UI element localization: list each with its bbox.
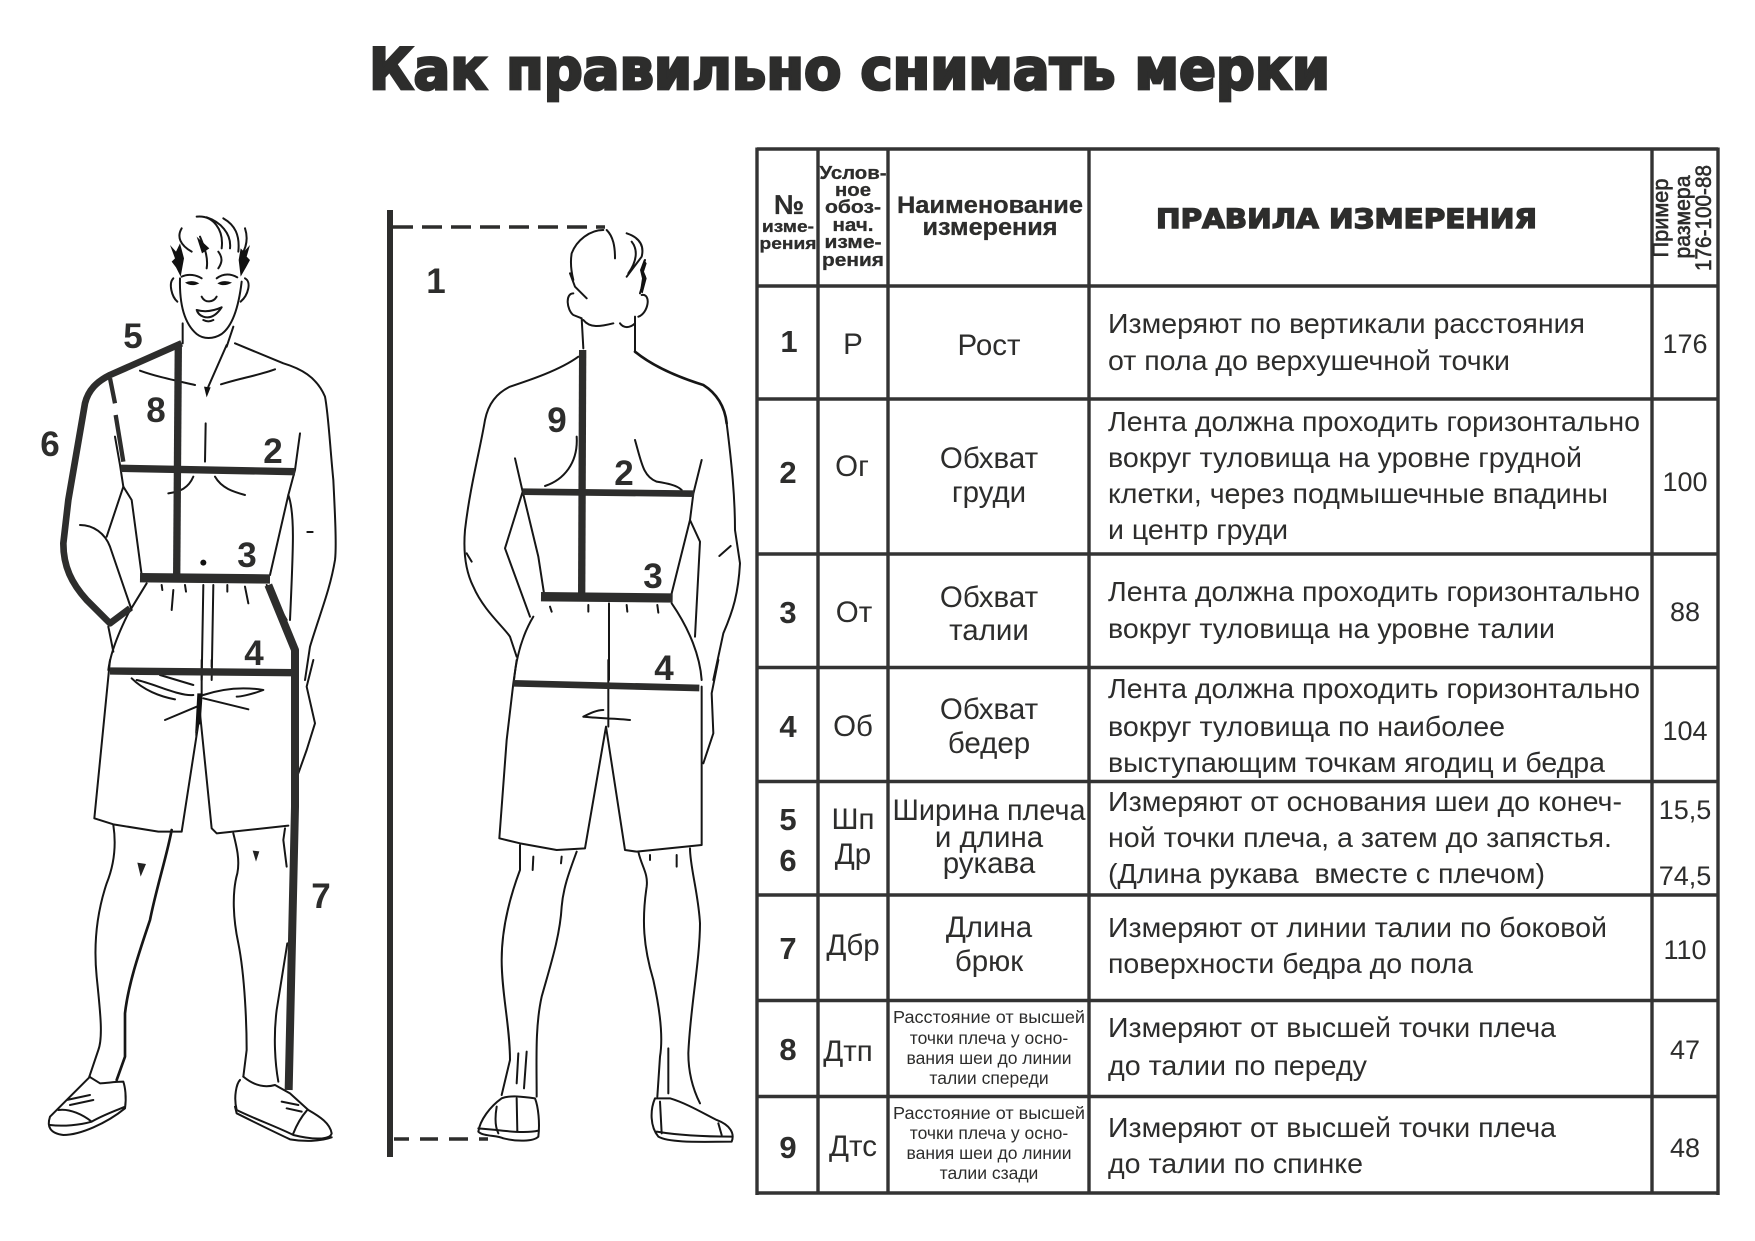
row 5-6: shoulder and sleeve [779,786,1711,891]
row 2: chest [779,406,1708,545]
front figure labels: 4 [244,634,264,673]
front figure labels [40,317,331,916]
row 9: back waist length: вания шеи до линии [906,1143,1072,1163]
table header row: ПРАВИЛА ИЗМЕРЕНИЯ [1156,204,1537,235]
row 3: waist [779,576,1700,647]
row 9: back waist length: 48 [1670,1133,1700,1163]
front length line 8 [177,343,178,578]
shoulder and sleeve line 5-6 [63,343,182,623]
row 1: height: Рост [957,329,1021,362]
row 9: back waist length: Расстояние от высшей [893,1103,1085,1123]
row 8: front waist length: талии спереди [929,1068,1049,1088]
row 2: chest: клетки, через подмышечные впадины [1108,478,1608,509]
row 4: hips: Лента должна проходить горизонтально [1108,673,1640,704]
back figure legs and shoes [478,660,733,1142]
row 2: chest: 2 [779,455,797,490]
back figure labels [547,401,674,688]
table header row: измерения [922,214,1058,241]
chest line 2 [121,468,295,472]
row 8: front waist length: до талии по переду [1108,1050,1367,1081]
table header row: изме- [824,231,882,252]
row 9: back waist length: Измеряют от высшей точки плеча [1108,1112,1556,1143]
front figure labels: 2 [263,432,283,471]
row 9: back waist length: до талии по спинке [1108,1148,1363,1179]
row 1: height [780,308,1708,376]
table header row: 176-100-88 [1691,165,1716,271]
row 3: waist: Обхват [940,581,1038,614]
front figure legs and shoes [49,660,332,1141]
height scale with dashed guides: 1 [426,262,446,301]
table header row: ное [835,179,871,200]
row 9: back waist length: 9 [779,1130,797,1165]
table header row: рения [822,249,884,270]
table header row: Наименование [897,192,1083,219]
back figure labels: 3 [643,557,663,596]
row 9: back waist length: Дтс [829,1130,877,1163]
row 3: waist: 3 [779,595,797,630]
row 5-6: shoulder and sleeve: 15,5 [1659,795,1711,825]
row 5-6: shoulder and sleeve: 5 [779,802,797,837]
row 8: front waist length: Расстояние от высшей [893,1007,1085,1027]
table header row: Пример [1648,178,1673,258]
row 5-6: shoulder and sleeve: (Длина рукава вместе с плечом) [1108,858,1545,889]
row 4: hips [779,673,1708,778]
row 3: waist: 88 [1670,597,1700,627]
front figure labels: 6 [40,425,60,464]
row 8: front waist length: 47 [1670,1035,1700,1065]
front figure labels: 7 [311,877,331,916]
row 4: hips: 104 [1662,716,1708,746]
back figure labels: 4 [654,649,674,688]
row 3: waist: вокруг туловища на уровне талии [1108,613,1555,644]
row 3: waist: талии [949,614,1029,647]
row 2: chest: Обхват [940,442,1038,475]
row 7: trouser length: 7 [779,931,797,966]
table grid [757,148,1718,1195]
row 5-6: shoulder and sleeve: рукава [943,847,1036,880]
row 4: hips: 4 [779,709,797,744]
back chest line 2 [523,492,694,494]
back length line 9 [582,350,583,597]
row 1: height: от пола до верхушечной точки [1108,345,1510,376]
waist line 3 [140,578,270,579]
measurement table [757,148,1718,1195]
front figure labels: 3 [237,536,257,575]
front figure upper body outline [80,217,336,680]
row 9: back waist length: талии сзади [940,1163,1038,1183]
front figure labels: 5 [123,317,143,356]
row 2: chest: 100 [1662,467,1708,497]
front figure with measurement lines [40,217,336,1141]
row 9: back waist length: точки плеча у осно- [910,1123,1068,1143]
back figure labels: 2 [614,454,634,493]
row 8: front waist length: вания шеи до линии [906,1048,1072,1068]
row 2: chest: Ог [835,450,869,483]
table header row: № [774,190,804,220]
row 2: chest: и центр груди [1108,514,1288,545]
front figure labels: 8 [146,391,166,430]
row 9: back waist length [779,1103,1700,1183]
table header row: рения [760,234,816,253]
row 5-6: shoulder and sleeve: Измеряют от основания шеи до конеч- [1108,786,1622,817]
row 5-6: shoulder and sleeve: Ширина плеча [892,794,1086,827]
row 1: height: 176 [1662,329,1708,359]
row 1: height: 1 [780,324,798,359]
back waist line 3 [541,597,673,598]
row 8: front waist length: Дтп [823,1035,873,1068]
back figure upper body outline [464,230,740,680]
height scale with dashed guides [387,210,605,1157]
row 1: height: Р [843,328,863,361]
row 7: trouser length: поверхности бедра до пола [1108,948,1473,979]
dashed armhole line [110,378,123,462]
row 3: waist: От [836,596,872,629]
row 8: front waist length: точки плеча у осно- [910,1028,1068,1048]
row 7: trouser length: 110 [1663,935,1707,965]
back figure labels: 9 [547,401,567,440]
row 5-6: shoulder and sleeve: Др [835,838,871,871]
table header row [760,162,1716,271]
back hip line 4 [513,683,699,688]
row 3: waist: Лента должна проходить горизонтально [1108,576,1640,607]
row 7: trouser length: брюк [955,945,1024,978]
title: Как правильно снимать мерки [369,37,1330,103]
row 2: chest: вокруг туловища на уровне грудной [1108,442,1582,473]
row 5-6: shoulder and sleeve: 74,5 [1659,861,1711,891]
row 5-6: shoulder and sleeve: 6 [779,843,797,878]
row 4: hips: Обхват [940,693,1038,726]
row 7: trouser length [779,911,1707,979]
row 2: chest: груди [952,476,1026,509]
row 7: trouser length: Измеряют от линии талии по боковой [1108,912,1607,943]
row 5-6: shoulder and sleeve: и длина [935,821,1044,854]
row 4: hips: вокруг туловища по наиболее [1108,711,1505,742]
back figure with measurement lines [464,230,740,1142]
row 7: trouser length: Длина [946,911,1033,944]
row 5-6: shoulder and sleeve: Шп [831,803,875,836]
table header row: нач. [832,214,874,235]
hip line 4 [110,671,295,673]
row 4: hips: бедер [948,727,1030,760]
row 7: trouser length: Дбр [826,929,880,962]
row 5-6: shoulder and sleeve: ной точки плеча, а затем до запястья. [1108,822,1612,853]
row 4: hips: Об [833,710,873,743]
row 8: front waist length: 8 [779,1032,797,1067]
table header row: размера [1670,175,1695,258]
trouser length line 7 [268,585,295,1090]
row 1: height: Измеряют по вертикали расстояния [1108,308,1585,339]
row 8: front waist length: Измеряют от высшей точки плеча [1108,1012,1556,1043]
row 2: chest: Лента должна проходить горизонтально [1108,406,1640,437]
table header row: обоз- [825,196,881,217]
table header row: изме- [762,217,814,236]
row 4: hips: выступающим точкам ягодиц и бедра [1108,747,1605,778]
row 8: front waist length [779,1007,1700,1088]
table header row: Услов- [820,162,886,183]
